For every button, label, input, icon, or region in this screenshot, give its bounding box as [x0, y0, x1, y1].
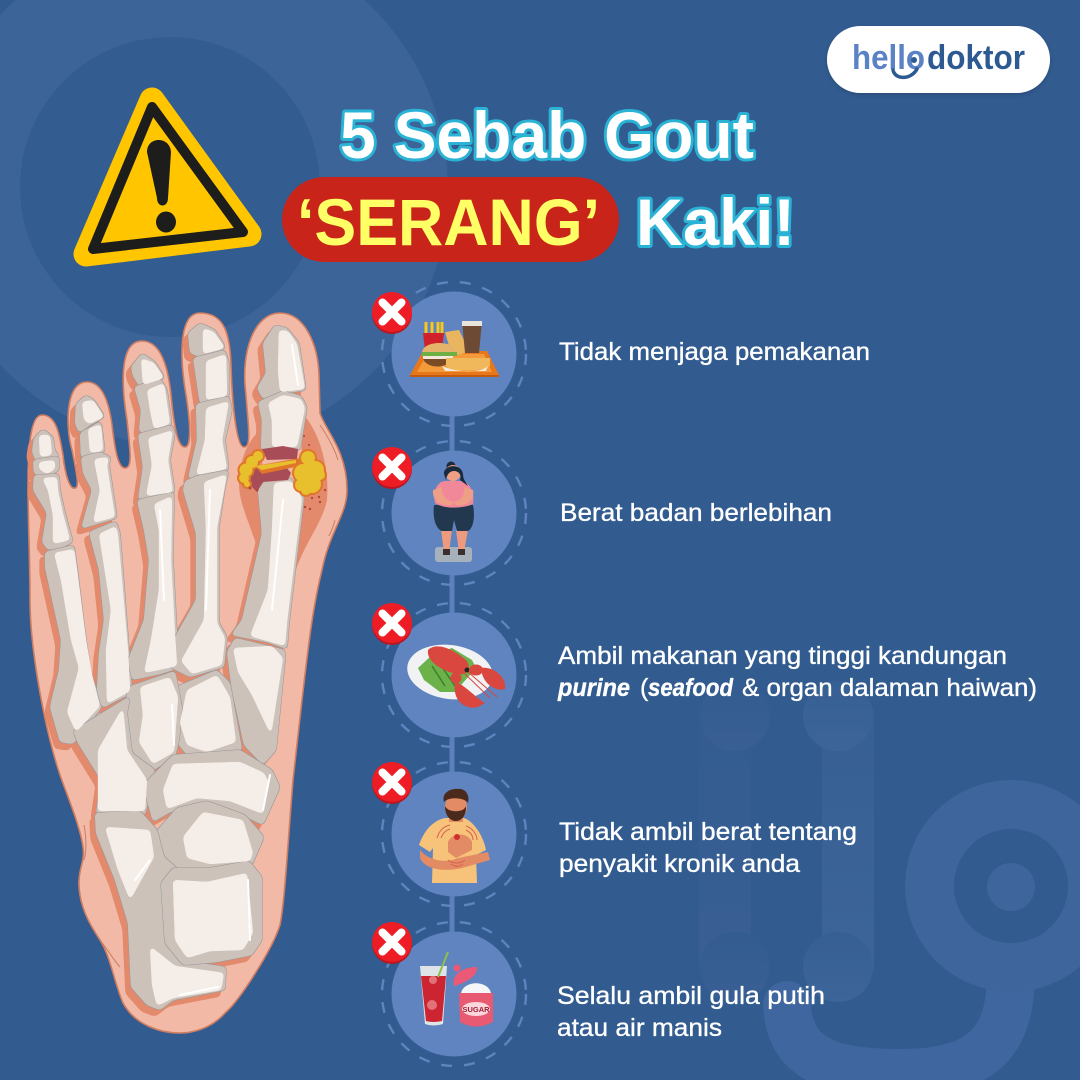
text: item 5: Selalu ambil gula putih [557, 982, 825, 1010]
joint erosion [247, 446, 298, 492]
item 5: sugar [382, 922, 526, 1066]
skin creases [84, 425, 338, 967]
connector lines [450, 410, 454, 935]
logo: hellodoktor: hello [852, 39, 925, 77]
badge: cross 4 [372, 762, 412, 804]
item 4: chronic illness [382, 762, 526, 906]
talus bone [161, 861, 262, 965]
text: item 4 [559, 818, 857, 878]
inflammation dots [248, 435, 326, 510]
icon: warning triangle [86, 100, 249, 254]
text: item 4: Tidak ambil berat tentang [559, 818, 857, 846]
badge: cross 5 [372, 922, 412, 964]
item 1: food [382, 282, 526, 426]
text: item 3: seafood [648, 674, 734, 702]
icon: overweight woman on scale [433, 462, 474, 562]
illustration: foot skeleton with gout [28, 313, 347, 1033]
text: item 3: & organ dalaman haiwan) [742, 674, 1037, 702]
text: item 3 [557, 642, 1037, 702]
badge: cross 2 [372, 447, 412, 489]
title line 1: 5 Sebab Gout [340, 98, 754, 172]
item 2: overweight [382, 441, 526, 585]
second toe bones [75, 395, 132, 708]
bones [32, 323, 307, 1010]
badge: cross 3 [372, 603, 412, 645]
logo: hellodoktor: doktor [927, 39, 1025, 77]
watermark: stethoscope logo [699, 681, 1080, 1073]
text: item 1: Tidak menjaga pemakanan [559, 338, 870, 366]
text: item 3: purine [557, 674, 630, 702]
text: item 5 [557, 982, 825, 1042]
title highlight pill: SERANG: ‘SERANG’ [297, 185, 600, 259]
little toe bones [32, 429, 102, 744]
logo: hellodoktor [827, 26, 1050, 93]
heel bone [95, 811, 226, 1010]
third toe bones [128, 353, 179, 680]
icon: man holding chest [419, 789, 490, 883]
foot skin [28, 313, 347, 1033]
fourth toe bones [170, 323, 232, 677]
badge: cross 1 [372, 292, 412, 334]
foot midbones [73, 638, 285, 872]
icon: red drink and sugar jar: SUGAR [462, 1005, 490, 1014]
icon: fast food tray [410, 321, 499, 377]
text: item 5: atau air manis [557, 1014, 722, 1042]
icon: lobster on plate [404, 639, 505, 708]
title line 2: Kaki! [636, 185, 795, 259]
bone glints [135, 345, 298, 995]
big toe bones [231, 325, 307, 649]
text: item 3: ( [640, 674, 649, 702]
text: item 2: Berat badan berlebihan [560, 499, 832, 527]
text: item 3: Ambil makanan yang tinggi kandungan [558, 642, 1007, 670]
item 3: seafood [382, 603, 526, 747]
inflamed area around big toe joint [239, 414, 327, 582]
icon: red drink and sugar jar [420, 952, 493, 1026]
text: item 4: penyakit kronik anda [559, 850, 800, 878]
gout crystal deposits [237, 449, 327, 497]
bone highlights [39, 328, 305, 1006]
background decorative circles [0, 0, 448, 448]
